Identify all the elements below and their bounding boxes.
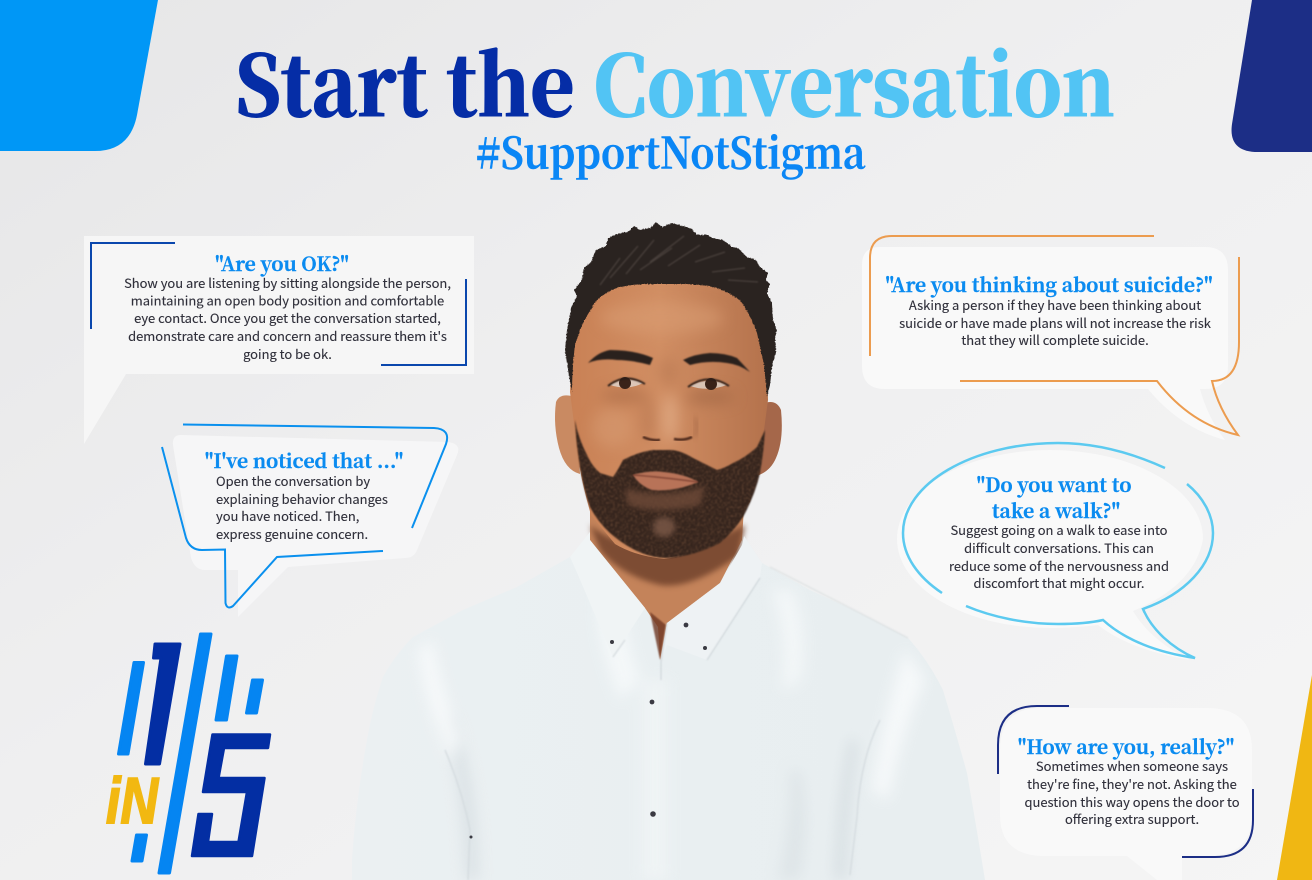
bubble background	[1000, 708, 1252, 880]
body text: question this way opens the door to	[1024, 792, 1240, 811]
neck shadow	[590, 525, 745, 586]
top-right corner shape	[1232, 0, 1312, 152]
body text	[1024, 756, 1240, 828]
nose wing	[694, 418, 697, 437]
shirt shoulder edge	[770, 567, 908, 638]
lower lip beard tone	[625, 486, 705, 510]
shirt buttons	[470, 623, 707, 838]
panel: are you ok	[84, 236, 474, 444]
shirt highlights	[418, 580, 925, 880]
right brow	[683, 353, 750, 372]
logo numeral 5	[192, 734, 270, 856]
hashtag subtitle: #SupportNotStigma	[477, 119, 866, 181]
neck	[590, 490, 745, 660]
shirt sleeve seams	[445, 720, 880, 880]
right ear	[756, 402, 782, 476]
neck v shadow	[650, 612, 666, 660]
beard	[575, 420, 765, 558]
body text: reduce some of the nervousness and	[949, 556, 1169, 575]
body text: difficult conversations. This can	[964, 538, 1154, 557]
body text	[899, 295, 1211, 349]
heading: "Are you OK?"	[215, 249, 349, 277]
body text: Sometimes when someone says	[1036, 756, 1228, 775]
bubble background	[897, 450, 1203, 660]
left brow	[588, 350, 653, 365]
heading: "I've noticed that ..."	[205, 446, 403, 474]
body text: express genuine concern.	[216, 524, 368, 543]
lip line	[633, 475, 698, 482]
nostrils	[643, 437, 692, 440]
face	[570, 277, 768, 559]
body text: that they will complete suicide.	[961, 330, 1149, 349]
bottom-right corner shape	[1277, 675, 1312, 880]
lips	[633, 471, 698, 490]
body text	[124, 273, 451, 363]
body text: Show you are listening by sitting alongside the person,	[124, 273, 451, 292]
shirt placket	[671, 660, 673, 880]
logo word in: iN	[106, 764, 160, 837]
person photo illustration	[352, 222, 985, 880]
body text: going to be ok.	[243, 344, 332, 363]
shirt body	[352, 536, 985, 880]
bubble background	[173, 435, 458, 617]
heading: "Are you thinking about suicide?"	[885, 270, 1213, 298]
left ear	[555, 395, 580, 474]
body text: Open the conversation by	[216, 471, 370, 490]
panel: do you want to take a walk	[897, 443, 1213, 660]
body text: demonstrate care and concern and reassure them it's	[128, 326, 447, 345]
body text: explaining behavior changes	[216, 489, 388, 508]
body text: Asking a person if they have been thinking about	[909, 295, 1201, 314]
heading	[977, 470, 1131, 524]
panel: are you thinking about suicide	[862, 236, 1239, 440]
heading: take a walk?"	[992, 496, 1120, 524]
shirt folds and shadows	[445, 715, 858, 880]
hair	[565, 222, 777, 397]
body text: maintaining an open body position and comfortable	[131, 290, 444, 310]
bubble background	[84, 236, 474, 444]
hair streaks	[600, 236, 758, 285]
body text: offering extra support.	[1065, 809, 1199, 828]
chin patch	[653, 517, 675, 537]
body text: they're fine, they're not. Asking the	[1027, 774, 1237, 793]
right eye	[688, 378, 729, 390]
panel: i've noticed that	[162, 424, 458, 617]
body text: you have noticed. Then,	[216, 506, 359, 525]
logo: 1 in 5	[106, 634, 270, 873]
logo light blue bars	[118, 634, 262, 873]
left collar	[570, 532, 645, 657]
logo numeral 1	[146, 644, 180, 764]
top-left corner shape	[0, 0, 158, 151]
body text: eye contact. Once you get the conversation started,	[134, 308, 441, 327]
face highlights and shadows	[592, 302, 734, 448]
bubble outline	[162, 424, 447, 607]
title: Start the Conversation	[235, 20, 1115, 140]
collar fold lines	[613, 578, 760, 680]
body text	[949, 520, 1169, 592]
body text: suicide or have made plans will not increase the risk	[899, 313, 1211, 332]
body text	[216, 471, 388, 543]
body text: Suggest going on a walk to ease into	[950, 520, 1168, 539]
right collar	[661, 536, 762, 662]
corner lines	[91, 243, 466, 365]
left eye	[608, 377, 645, 389]
bubble background	[862, 247, 1228, 440]
bubble outline	[903, 443, 1213, 658]
heading: "Do you want to	[977, 470, 1131, 498]
corner lines	[998, 706, 1253, 857]
bubble outline	[870, 236, 1239, 435]
heading: "How are you, really?"	[1018, 732, 1234, 760]
panel: how are you really	[998, 706, 1253, 880]
body text: discomfort that might occur.	[974, 573, 1144, 592]
